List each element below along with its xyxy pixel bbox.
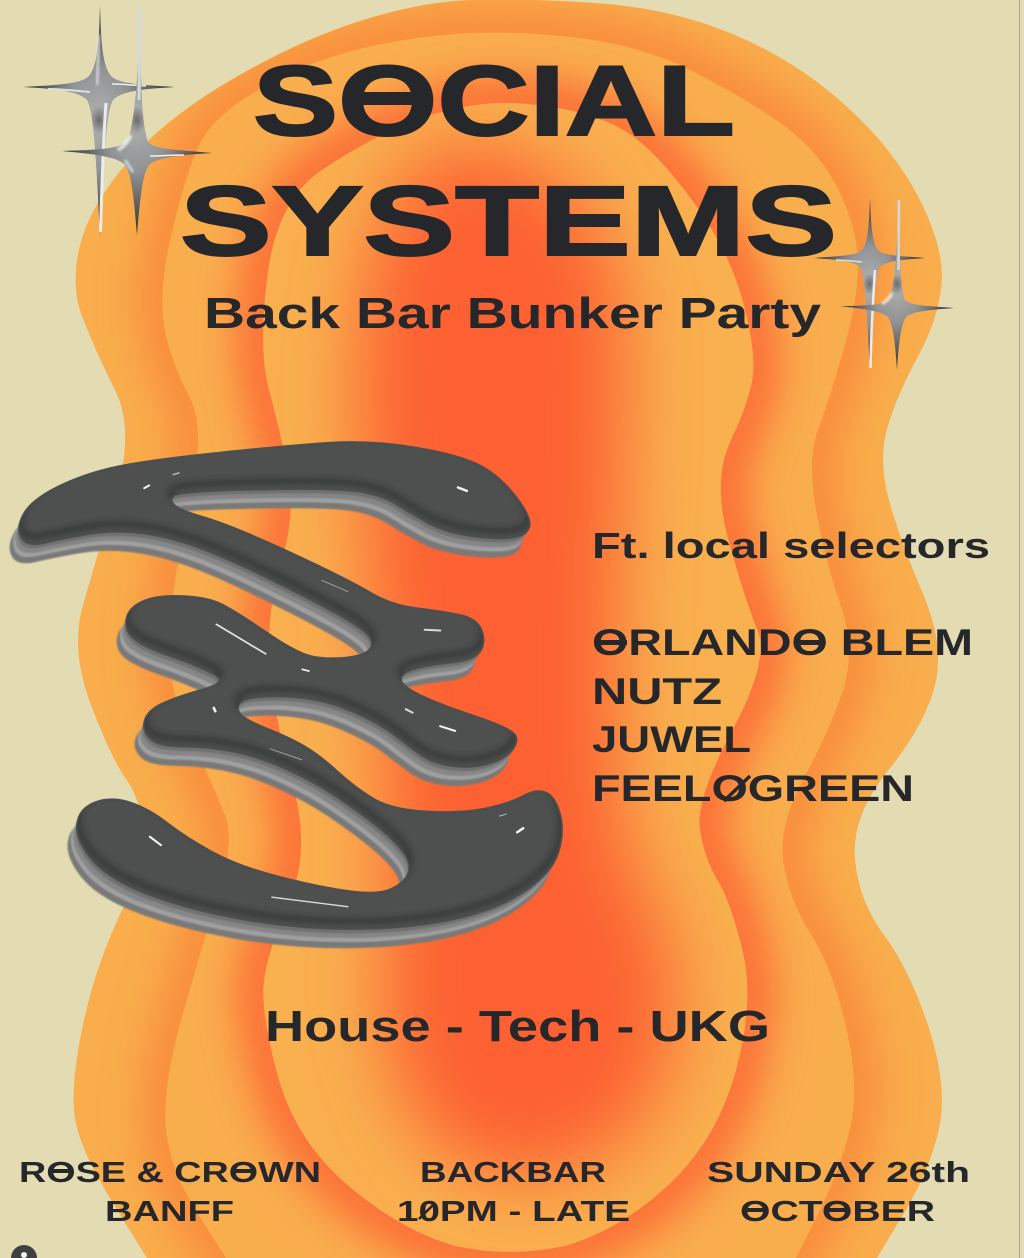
- blob: dark glossy face: [20, 435, 561, 929]
- sparkle: lower: [62, 5, 212, 235]
- band: middle wave: [162, 32, 858, 1258]
- venue: [19, 1157, 321, 1228]
- subtitle: Back Bar Bunker Party: [204, 289, 822, 338]
- icon: dark pin at bottom left: [11, 1245, 37, 1258]
- blob: highlights: [144, 473, 523, 907]
- sparkle: upper: [23, 5, 175, 235]
- blob: grey extrusion: [11, 447, 560, 947]
- lineup names: NUTZ: [592, 671, 722, 712]
- lineup heading: Ft. local selectors: [592, 525, 990, 566]
- time: [397, 1157, 630, 1228]
- date: SUNDAY 26th: [707, 1157, 970, 1189]
- right edge line: [1019, 0, 1020, 1258]
- title: SYSTEMS: [180, 165, 837, 276]
- venue: BANFF: [105, 1196, 234, 1228]
- lineup names: [592, 622, 973, 809]
- lineup names: ORLANDO BLEM: [592, 622, 973, 663]
- 3D chrome S-shaped blob: [11, 435, 561, 947]
- lineup names: JUWEL: [592, 719, 751, 760]
- genres: House - Tech - UKG: [265, 1002, 770, 1051]
- date: [707, 1157, 970, 1228]
- lineup names: FEELOGREEN: [592, 768, 914, 809]
- time: BACKBAR: [420, 1157, 606, 1189]
- icon: chrome sparkles right: [814, 198, 954, 370]
- title: [180, 45, 837, 276]
- time: 10PM - LATE: [397, 1196, 630, 1228]
- venue: ROSE & CROWN: [19, 1157, 321, 1189]
- sparkle: lower: [840, 198, 954, 370]
- date: OCTOBER: [740, 1196, 935, 1228]
- icon: chrome sparkles top left: [23, 5, 212, 235]
- title: SOCIAL: [253, 45, 735, 156]
- band: inner wave with red core: [263, 103, 761, 1252]
- sparkle: upper: [814, 198, 925, 370]
